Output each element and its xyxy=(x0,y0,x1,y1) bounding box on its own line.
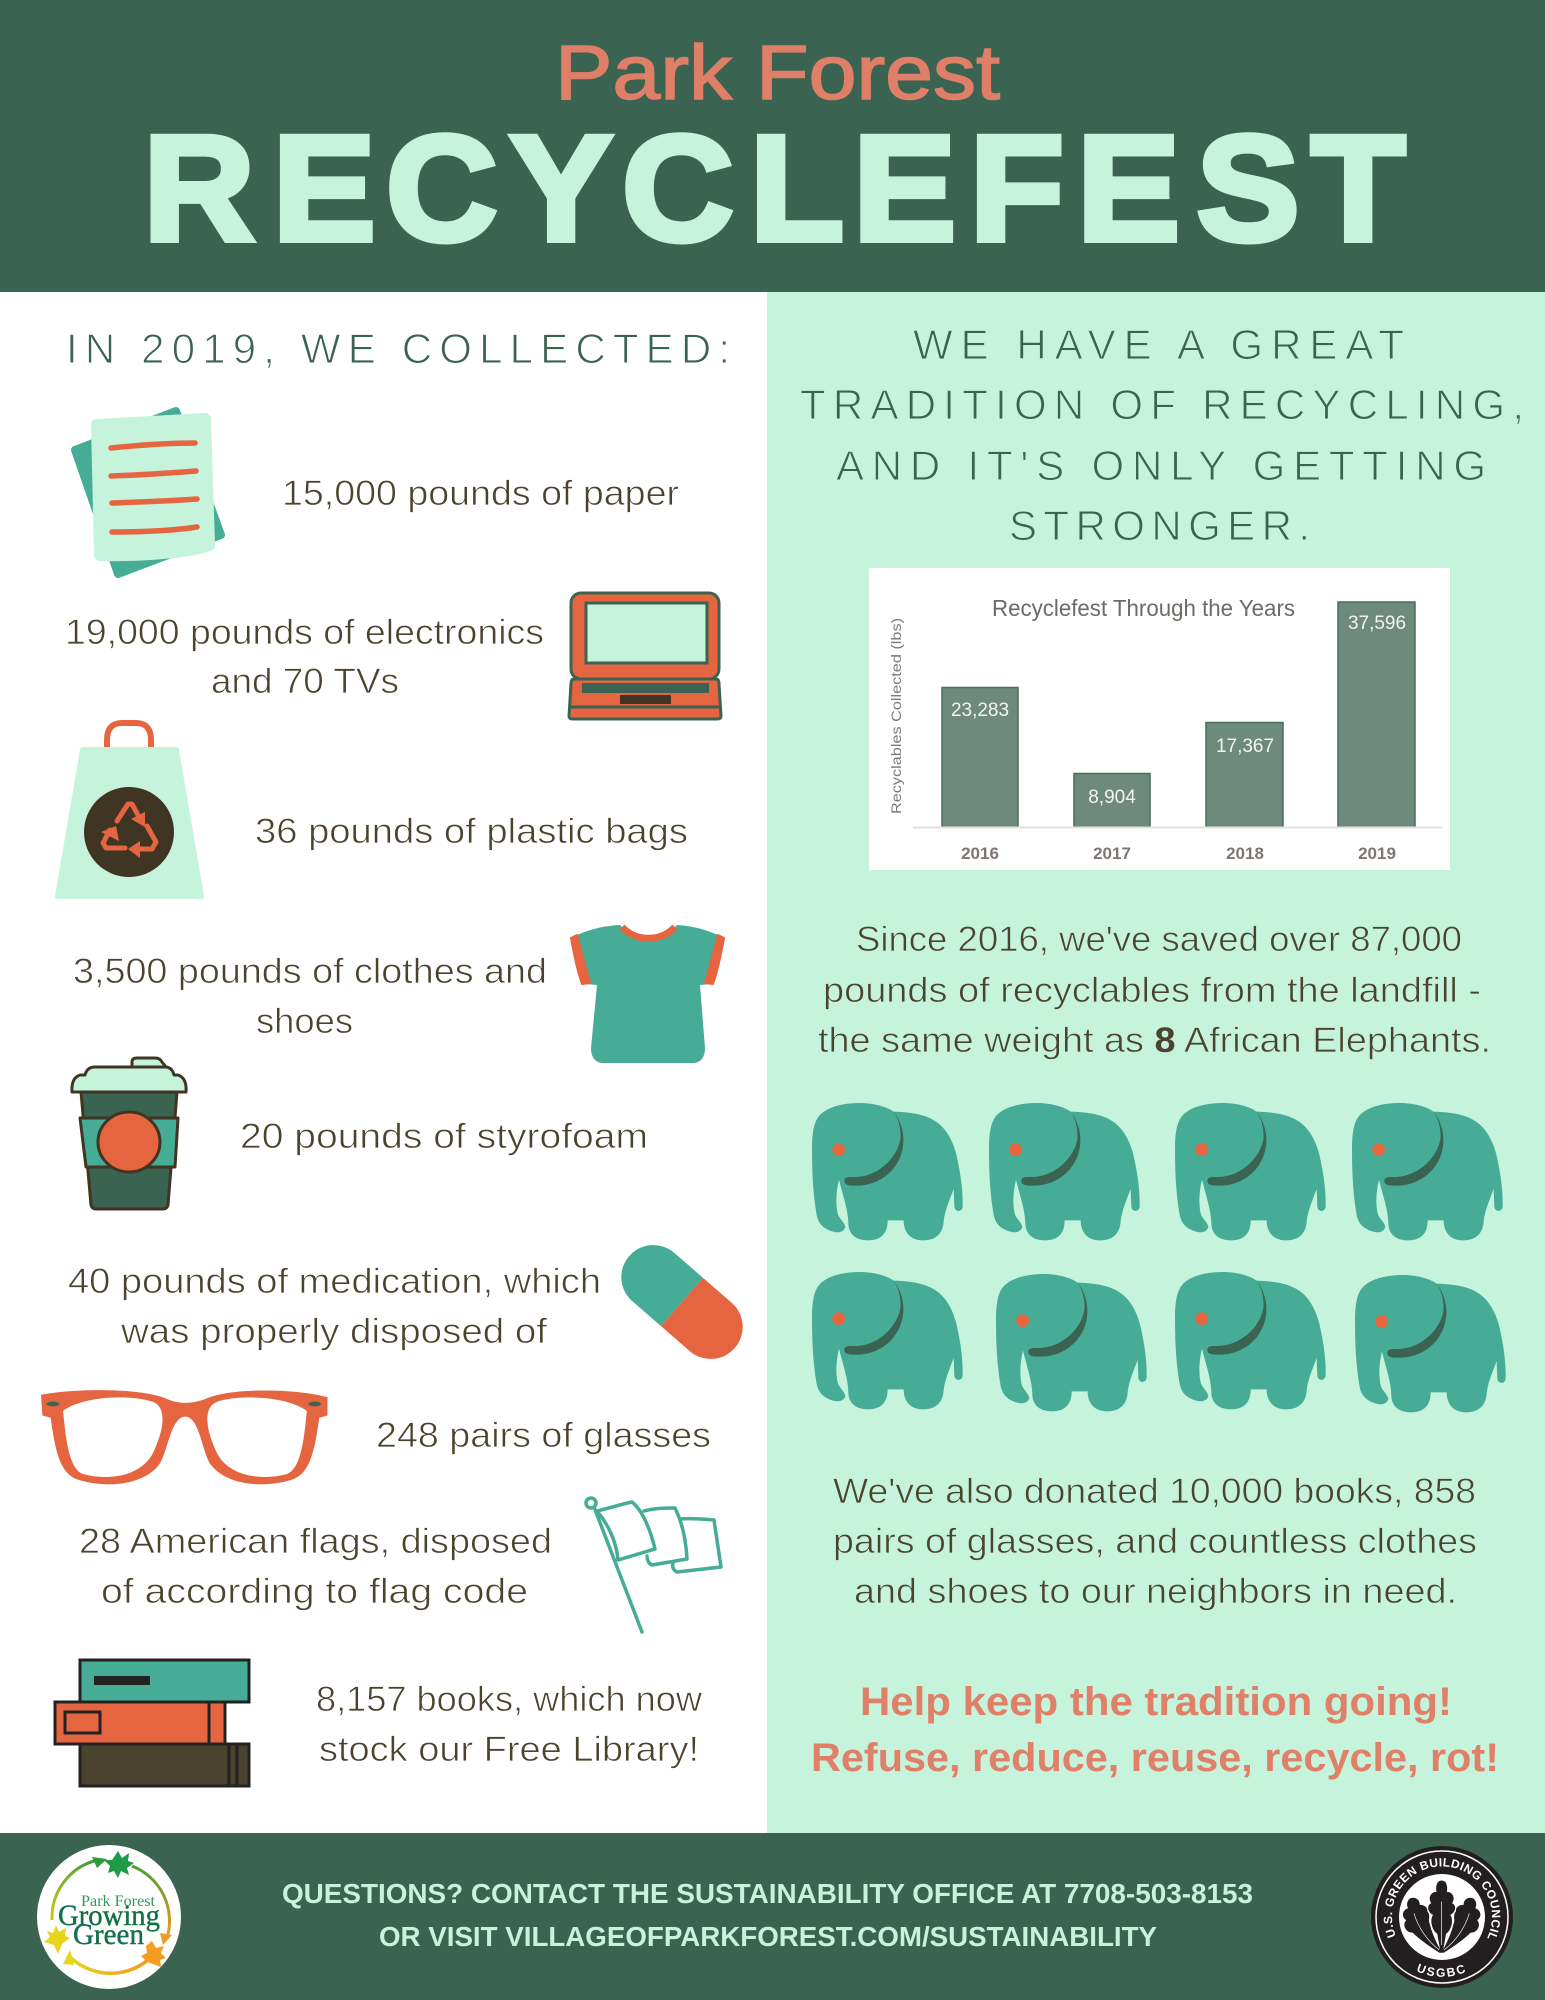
icon: laptop xyxy=(569,593,721,719)
item: plastic bags xyxy=(58,723,688,896)
bar value labels xyxy=(951,613,1406,808)
year labels xyxy=(961,844,1396,863)
icon: stack of books xyxy=(55,1660,249,1786)
icon: elephant 1 xyxy=(812,1103,963,1240)
text: saved from landfill xyxy=(818,920,1491,1060)
text: flags: of according to flag code xyxy=(101,1572,528,1611)
year labels: 2018 xyxy=(1226,844,1264,863)
bars xyxy=(942,602,1415,828)
heading: in 2019 we collected: IN 2019, WE COLLECTED: xyxy=(66,325,730,372)
text: donations xyxy=(833,1472,1477,1611)
footer contact text: OR VISIT VILLAGEOFPARKFOREST.COM/SUSTAINABILITY xyxy=(379,1921,1157,1952)
text: clothes and shoes: 3,500 pounds of clothes and xyxy=(73,952,547,991)
heading: great tradition of recycling xyxy=(800,321,1524,549)
title: Park Forest: Park Forest xyxy=(555,30,1000,116)
text: electronics: and 70 TVs xyxy=(211,662,399,701)
text: styrofoam: 20 pounds of styrofoam xyxy=(240,1117,648,1156)
text: paper: 15,000 pounds of paper xyxy=(282,474,679,513)
item: clothes and shoes xyxy=(73,925,724,1063)
item: glasses xyxy=(41,1390,711,1484)
callout: keep the tradition going: Refuse, reduce, reuse, recycle, rot! xyxy=(811,1736,1499,1780)
icon: elephant 4 xyxy=(1352,1103,1503,1240)
icon: flag xyxy=(586,1498,721,1632)
bar value labels: 23,283 xyxy=(951,700,1009,721)
text: books: 8,157 books, which now xyxy=(316,1680,703,1719)
text: saved from landfill: pounds of recyclables from the landfill - xyxy=(823,971,1481,1010)
text: medication: was properly disposed of xyxy=(120,1312,547,1351)
text: books: stock our Free Library! xyxy=(319,1730,699,1769)
icon: pill capsule xyxy=(608,1232,756,1372)
icon: paper sheets xyxy=(75,411,221,574)
text: flags: 28 American flags, disposed xyxy=(79,1522,552,1561)
logo: USGBC seal: USGBC xyxy=(1418,1964,1465,1977)
panel: what we collected in 2019 xyxy=(41,325,756,1786)
bar value labels: 37,596 xyxy=(1348,613,1406,634)
icon: coffee cup xyxy=(72,1058,186,1209)
year labels: 2016 xyxy=(961,844,999,863)
footer banner xyxy=(0,1833,1545,2000)
item: paper xyxy=(75,411,679,574)
item: medication xyxy=(68,1232,756,1372)
text: glasses: 248 pairs of glasses xyxy=(376,1416,711,1455)
footer contact text xyxy=(282,1878,1253,1952)
header banner xyxy=(0,0,1545,292)
text: donations: pairs of glasses, and countless clothes xyxy=(833,1522,1477,1561)
title: RECYCLEFEST: RECYCLEFEST xyxy=(143,105,1405,273)
icon: elephant 2 xyxy=(989,1103,1140,1240)
text: clothes and shoes xyxy=(73,952,547,1041)
y axis label: Recyclables Collected (lbs) xyxy=(888,618,904,814)
icon: glasses xyxy=(41,1390,327,1484)
logo: Park Forest Growing Green: Park Forest xyxy=(81,1893,156,1910)
heading: great tradition of recycling: AND IT'S ONLY GETTING xyxy=(836,442,1486,489)
text: medication: 40 pounds of medication, which xyxy=(68,1262,601,1301)
heading: great tradition of recycling: WE HAVE A GREAT xyxy=(913,321,1404,368)
bar value labels: 17,367 xyxy=(1216,736,1274,757)
year labels: 2017 xyxy=(1093,844,1131,863)
icon: elephant 5 xyxy=(812,1272,963,1409)
callout: keep the tradition going: Help keep the tradition going! xyxy=(860,1680,1452,1724)
panel: white page background xyxy=(0,292,767,1833)
logo: Park Forest Growing Green: Growing xyxy=(58,1899,160,1932)
logo: Park Forest Growing Green: Green xyxy=(73,1918,144,1951)
item: electronics xyxy=(65,593,721,719)
logo: USGBC seal: U.S. GREEN BUILDING COUNCIL xyxy=(1384,1858,1500,1938)
year labels: 2019 xyxy=(1358,844,1396,863)
text: saved from landfill: the same weight as 8 African Elephants. xyxy=(818,1021,1491,1060)
icon group: eight elephants xyxy=(812,1103,1506,1412)
text: electronics xyxy=(65,613,544,701)
panel: tradition of recycling xyxy=(767,292,1545,1833)
text: books xyxy=(316,1680,703,1769)
logo: USGBC seal xyxy=(1371,1846,1513,1988)
text: donations: and shoes to our neighbors in need. xyxy=(854,1572,1457,1611)
heading: great tradition of recycling: STRONGER. xyxy=(1009,502,1310,549)
icon: recycling bag xyxy=(58,723,201,896)
icon: t-shirt xyxy=(571,925,724,1063)
text: donations: We've also donated 10,000 books, 858 xyxy=(833,1472,1476,1511)
footer contact text: QUESTIONS? CONTACT THE SUSTAINABILITY OFFICE AT 7708-503-8153 xyxy=(282,1878,1253,1909)
item: flags xyxy=(79,1498,721,1632)
text: medication xyxy=(68,1262,601,1351)
text: flags xyxy=(79,1522,552,1611)
item: styrofoam xyxy=(72,1058,648,1209)
callout: keep the tradition going xyxy=(811,1680,1499,1780)
text: clothes and shoes: shoes xyxy=(256,1002,353,1041)
chart title: Recyclefest Through the Years xyxy=(992,595,1295,621)
icon: elephant 8 xyxy=(1355,1275,1506,1412)
item: books xyxy=(55,1660,703,1786)
bar chart: recyclefest through the years xyxy=(869,568,1450,870)
logo: Park Forest Growing Green xyxy=(37,1845,181,1989)
icon: elephant 6 xyxy=(996,1274,1147,1411)
bar value labels: 8,904 xyxy=(1088,787,1136,808)
text: electronics: 19,000 pounds of electronics xyxy=(65,613,544,652)
heading: great tradition of recycling: TRADITION OF RECYCLING, xyxy=(800,381,1524,428)
text: saved from landfill: Since 2016, we've saved over 87,000 xyxy=(856,920,1462,959)
icon: elephant 7 xyxy=(1175,1272,1326,1409)
icon: elephant 3 xyxy=(1175,1103,1326,1240)
text: plastic bags: 36 pounds of plastic bags xyxy=(255,812,688,851)
